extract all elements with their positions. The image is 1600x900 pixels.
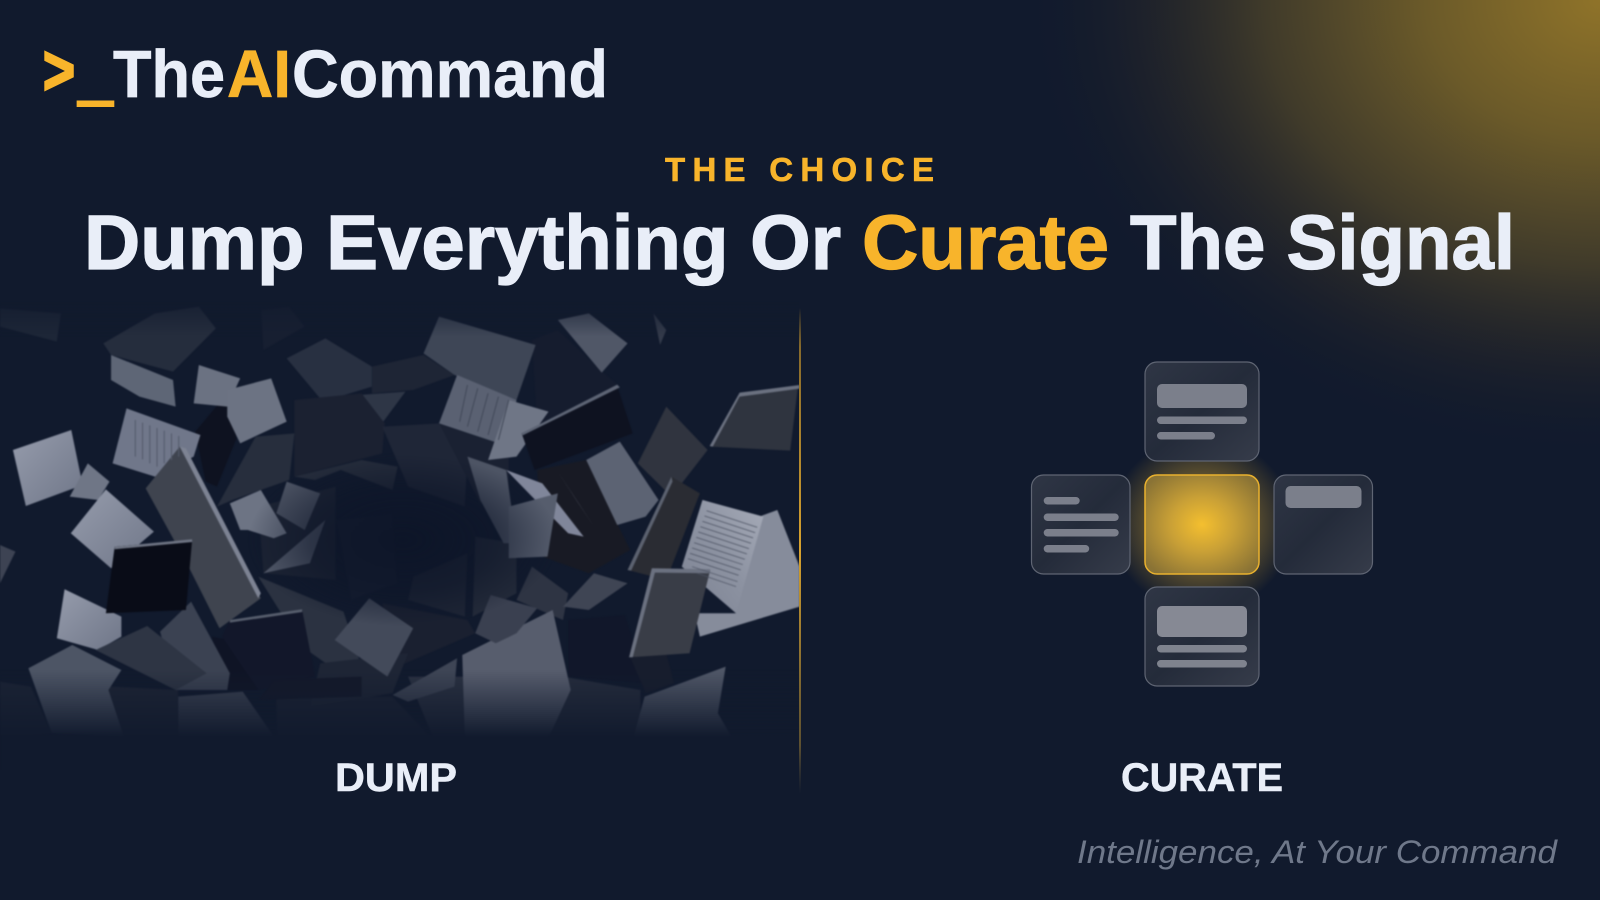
dark vortex centre [258, 472, 545, 616]
glow behind centre card [1110, 436, 1294, 612]
front layer: long slab, black sheet, dark folders [96, 385, 800, 700]
brand logo: _ [78, 37, 113, 112]
card: left [1032, 475, 1130, 574]
card: centre highlighted [1145, 475, 1259, 574]
panel: dump, scattered paper collage [0, 308, 799, 728]
label: curate: CURATE [1121, 756, 1283, 800]
brand logo: The [113, 37, 225, 112]
eyebrow: THE CHOICE [665, 151, 934, 188]
card: top [1145, 362, 1259, 461]
printed text lines on pages [135, 385, 757, 587]
panel: curate, card cross [1032, 362, 1372, 686]
tagline: Intelligence, At Your Command [1077, 834, 1558, 870]
brand logo [43, 31, 608, 112]
label: dump: DUMP [335, 756, 457, 800]
bottom fade [0, 678, 734, 741]
top fade [152, 307, 660, 330]
brand logo: AI [227, 37, 291, 112]
title: Dump Everything Or [84, 200, 841, 286]
title [84, 200, 1515, 286]
back layer of dark paper shards [0, 307, 674, 740]
brand logo: Command [292, 37, 608, 112]
title: Curate [862, 200, 1109, 286]
brand logo: > [43, 31, 75, 109]
card: bottom [1145, 587, 1259, 686]
divider line [799, 308, 801, 794]
title: The Signal [1130, 200, 1515, 286]
card: right [1274, 475, 1372, 574]
mid layer of lit paper sheets [0, 313, 798, 740]
